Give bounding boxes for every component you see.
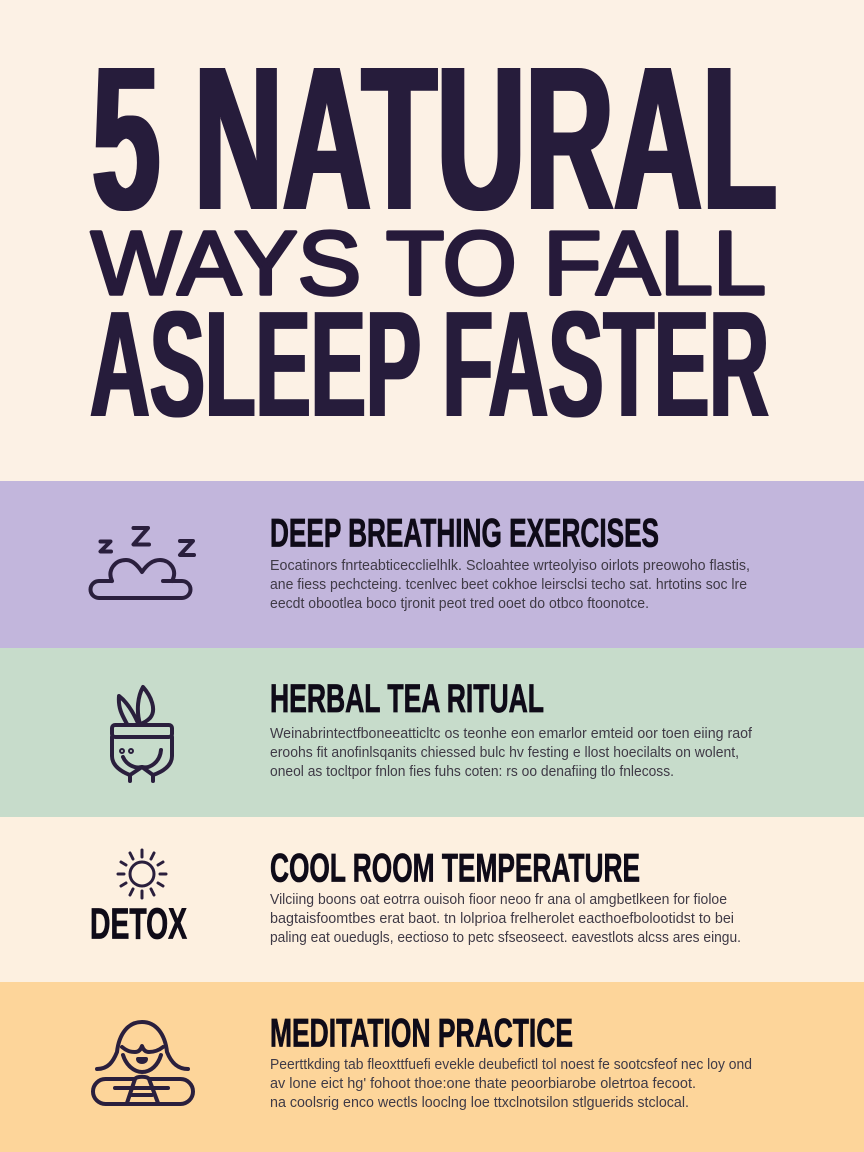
body text: Peerttkding tab fleoxttfuefi evekle deubefictl tol noest fe sootcsfeof nec loy ond — [270, 1057, 752, 1073]
body text: av lone eict hg' fohoot thoe:one thate peoorbiarobe oletrtoa fecoot. — [270, 1076, 696, 1092]
icon label: detox: DETOX — [90, 900, 187, 948]
body text: Weinabrintectfboneeatticltc os teonhe eon emarlor emteid oor toen eiing raof — [270, 726, 753, 742]
icon: meditating person — [93, 1022, 193, 1104]
heading: HERBAL TEA RITUAL — [270, 677, 544, 721]
body text: na coolsrig enco wectls looclng loe ttxclnotsilon stlguerids stclocal. — [270, 1095, 689, 1111]
body text — [270, 558, 750, 612]
body text: Eocatinors fnrteabticecclielhlk. Scloahtee wrteolyiso oirlots preowoho flastis, — [270, 558, 750, 574]
body text — [270, 1057, 752, 1111]
body text: oneol as tocltpor fnlon fies fuhs coten: rs oo denafiing tlo fnlecoss. — [270, 764, 674, 780]
body text: eroohs fit anofinlsqanits chiessed bulc hv festing e llost hoecilalts on wolent, — [270, 745, 739, 761]
panel: cool room temperature — [0, 817, 864, 982]
title: WAYS TO FALL — [91, 214, 766, 314]
title — [90, 24, 777, 448]
panel: herbal tea ritual — [0, 648, 864, 817]
icon: herbal tea cup — [112, 687, 172, 781]
panel: deep breathing exercises — [0, 481, 864, 648]
heading: MEDITATION PRACTICE — [270, 1012, 573, 1056]
heading: COOL ROOM TEMPERATURE — [270, 846, 640, 890]
heading: DEEP BREATHING EXERCISES — [270, 512, 659, 556]
body text: eecdt obootlea boco tjronit peot tred ooet do otbco ftoonotce. — [270, 596, 649, 612]
body text — [270, 726, 753, 780]
body text: bagtaisfoomtbes erat baot. tn lolprioa frelherolet eacthoefbolootidst to bei — [270, 911, 734, 927]
body text: paling eat ouedugls, eectioso to petc sfseoseect. eavestlots alcss ares eingu. — [270, 930, 741, 946]
body text — [270, 892, 741, 946]
panel: meditation practice — [0, 982, 864, 1152]
body text: Vilciing boons oat eotrra ouisoh fioor neoo fr ana ol amgbetlkeen for fioloe — [270, 892, 727, 908]
icon: sun — [118, 850, 166, 898]
body text: ane fiess pechcteing. tcenlvec beet cokhoe leirsclsi techo sat. hrtotins soc lre — [270, 577, 747, 593]
icon: sleeping cloud — [90, 528, 194, 598]
